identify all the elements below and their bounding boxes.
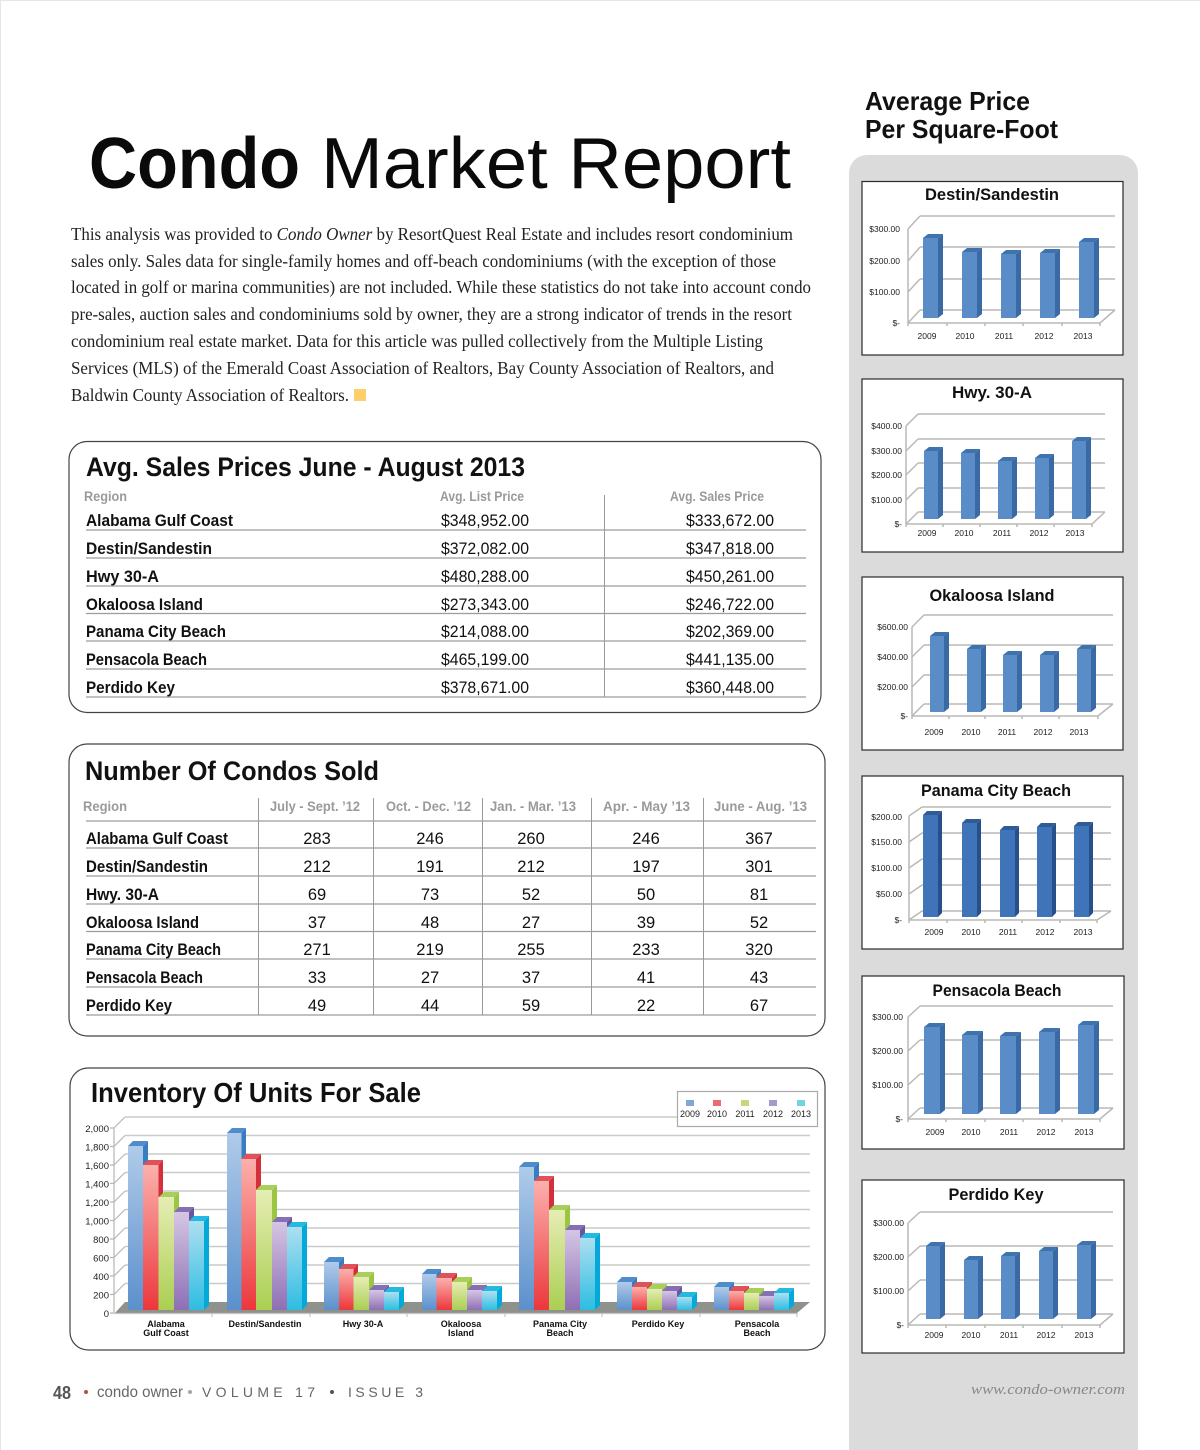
row: Okaloosa Island: 52 <box>750 914 768 932</box>
bars <box>924 1021 1099 1114</box>
y axis labels: 1,800 <box>85 1142 109 1154</box>
chart: Hwy. 30-A price per square foot <box>862 379 1123 552</box>
row: Hwy. 30-A: Hwy. 30-A <box>86 886 159 904</box>
row: Alabama Gulf Coast: 246 <box>416 830 444 848</box>
chart: Destin/Sandestin price per square foot: 2011 <box>995 331 1013 341</box>
y axis labels <box>85 1124 109 1320</box>
row: Panama City Beach <box>86 623 806 641</box>
chart: Panama City Beach price per square foot: $200.00 <box>871 812 902 822</box>
chart: Panama City Beach price per square foot: 2012 <box>1036 927 1055 937</box>
legend: 2012 <box>763 1109 783 1119</box>
chart: Destin/Sandestin price per square foot: 2012 <box>1035 331 1054 341</box>
column headers: June - Aug. ’13 <box>714 799 807 814</box>
chart: Panama City Beach price per square foot: $100.00 <box>871 863 902 873</box>
chart: Hwy. 30-A price per square foot: 2012 <box>1030 528 1049 538</box>
row: Pensacola Beach: $465,199.00 <box>441 651 529 669</box>
chart: Pensacola Beach price per square foot: 2010 <box>962 1127 981 1137</box>
column headers: Region <box>84 489 127 504</box>
chart: Hwy. 30-A price per square foot: $100.00 <box>871 495 902 505</box>
legend <box>678 1092 818 1126</box>
chart: Okaloosa Island price per square foot: 2012 <box>1034 727 1053 737</box>
chart: Pensacola Beach price per square foot: 2013 <box>1075 1127 1094 1137</box>
x axis labels: Beach <box>743 1328 771 1338</box>
chart: Destin/Sandestin price per square foot: Destin/Sandestin <box>925 185 1059 204</box>
row: Perdido Key: $378,671.00 <box>441 679 529 697</box>
chart: Okaloosa Island price per square foot: 2013 <box>1070 727 1089 737</box>
row: Panama City Beach: 219 <box>416 941 444 959</box>
row: Alabama Gulf Coast: $333,672.00 <box>686 512 774 530</box>
row: Alabama Gulf Coast: Alabama Gulf Coast <box>86 512 233 530</box>
x axis labels: Panama City <box>533 1319 587 1329</box>
row: Panama City Beach: Panama City Beach <box>86 623 226 641</box>
chart: Pensacola Beach price per square foot: $100.00 <box>872 1080 903 1090</box>
intro text block: Baldwin County Association of Realtors. <box>71 385 349 405</box>
bars <box>923 234 1099 318</box>
chart: Hwy. 30-A price per square foot: Hwy. 30-A <box>952 383 1032 402</box>
row: Panama City Beach: 320 <box>745 941 773 959</box>
row: Alabama Gulf Coast: 260 <box>517 830 545 848</box>
intro text block <box>71 224 811 405</box>
chart: Pensacola Beach price per square foot: $300.00 <box>872 1012 903 1022</box>
x axis labels: Island <box>448 1328 474 1338</box>
row: Alabama Gulf Coast <box>86 512 806 530</box>
chart: Perdido Key price per square foot: $200.00 <box>873 1252 904 1262</box>
chart: Panama City Beach price per square foot: $150.00 <box>871 837 902 847</box>
chart: Hwy. 30-A price per square foot: 2011 <box>993 528 1011 538</box>
row: Hwy. 30-A: 81 <box>750 886 768 904</box>
row: Okaloosa Island: 39 <box>637 914 655 932</box>
row: Alabama Gulf Coast: 367 <box>745 830 773 848</box>
row: Pensacola Beach <box>86 969 816 987</box>
chart: Panama City Beach price per square foot <box>862 776 1123 949</box>
row: Destin/Sandestin: Destin/Sandestin <box>86 858 208 876</box>
chart: Okaloosa Island price per square foot: Okaloosa Island <box>930 586 1054 605</box>
chart: Okaloosa Island price per square foot: 2009 <box>925 727 944 737</box>
intro text block: located in golf or marina communities) are not included. While these statistics do not take into account condo <box>71 277 811 297</box>
chart: Destin/Sandestin price per square foot: $- <box>892 318 900 328</box>
sidebar heading <box>865 86 1058 144</box>
chart: Perdido Key price per square foot: Perdido Key <box>948 1185 1044 1204</box>
chart: Hwy. 30-A price per square foot: 2010 <box>955 528 974 538</box>
chart: Pensacola Beach price per square foot: 2012 <box>1037 1127 1056 1137</box>
chart: Pensacola Beach price per square foot: $- <box>895 1114 903 1124</box>
row: Perdido Key <box>86 679 806 697</box>
y axis labels: 800 <box>93 1235 109 1246</box>
chart: Perdido Key price per square foot: $100.00 <box>873 1286 904 1296</box>
row: Hwy. 30-A: 73 <box>421 886 439 904</box>
chart: Panama City Beach price per square foot: 2009 <box>925 927 944 937</box>
chart: Perdido Key price per square foot: $- <box>896 1320 904 1330</box>
footer: page number and issue line: VOLUME 17 <box>202 1384 315 1400</box>
x axis labels: Destin/Sandestin <box>228 1319 302 1329</box>
row: Pensacola Beach: Pensacola Beach <box>86 969 203 987</box>
x axis labels: Alabama <box>147 1319 186 1329</box>
chart: Perdido Key price per square foot: 2011 <box>1000 1330 1018 1340</box>
row: Okaloosa Island: 48 <box>421 914 439 932</box>
chart: Okaloosa Island price per square foot: 2011 <box>998 727 1016 737</box>
chart: Panama City Beach price per square foot: Panama City Beach <box>921 781 1071 800</box>
chart: Pensacola Beach price per square foot <box>862 976 1124 1149</box>
row: Pensacola Beach: 43 <box>750 969 768 987</box>
chart: Pensacola Beach price per square foot: $200.00 <box>872 1046 903 1056</box>
row: Perdido Key: 59 <box>522 997 540 1015</box>
title: Market Report <box>321 124 791 204</box>
chart: Destin/Sandestin price per square foot: 2010 <box>956 331 975 341</box>
row: Okaloosa Island: $246,722.00 <box>686 596 774 614</box>
row: Alabama Gulf Coast <box>86 830 816 848</box>
row: Perdido Key <box>86 997 816 1015</box>
footer: page number and issue line: ISSUE 3 <box>348 1384 423 1400</box>
y axis labels: 0 <box>104 1309 109 1320</box>
row: Hwy 30-A: Hwy 30-A <box>86 568 159 586</box>
chart: Pensacola Beach price per square foot: Pensacola Beach <box>932 981 1062 1000</box>
chart: Destin/Sandestin price per square foot: 2009 <box>918 331 937 341</box>
chart: Hwy. 30-A price per square foot: $200.00 <box>871 470 902 480</box>
chart: Hwy. 30-A price per square foot: 2009 <box>918 528 937 538</box>
row: Destin/Sandestin: 212 <box>303 858 331 876</box>
chart: Destin/Sandestin price per square foot: $300.00 <box>869 224 900 234</box>
column headers: Apr. - May ’13 <box>603 799 690 814</box>
chart: Okaloosa Island price per square foot: $400.00 <box>877 652 908 662</box>
chart: Perdido Key price per square foot: 2009 <box>925 1330 944 1340</box>
sidebar heading: Per Square-Foot <box>865 114 1058 144</box>
bars: Pensacola Beach <box>714 1282 794 1310</box>
chart: Hwy. 30-A price per square foot: 2013 <box>1066 528 1085 538</box>
row: Okaloosa Island <box>86 914 816 932</box>
y axis labels: 1,200 <box>85 1198 109 1209</box>
row: Destin/Sandestin <box>86 858 816 876</box>
panel: number of condos sold table <box>69 744 825 1036</box>
row: Panama City Beach: 233 <box>632 941 660 959</box>
row: Alabama Gulf Coast: 283 <box>303 830 331 848</box>
legend: 2009 <box>680 1109 700 1119</box>
bars <box>924 437 1091 519</box>
row: Destin/Sandestin: 197 <box>632 858 660 876</box>
row: Okaloosa Island <box>86 596 806 614</box>
row: Panama City Beach: $214,088.00 <box>441 623 529 641</box>
chart: Destin/Sandestin price per square foot: $200.00 <box>869 256 900 266</box>
bars: Perdido Key <box>617 1277 697 1310</box>
x axis labels: Pensacola <box>735 1319 780 1329</box>
row: Alabama Gulf Coast: $348,952.00 <box>441 512 529 530</box>
panel: average sales prices table <box>69 442 821 712</box>
x axis labels: Gulf Coast <box>143 1328 189 1338</box>
row: Perdido Key: 22 <box>637 997 655 1015</box>
panel: inventory of units for sale <box>70 1068 825 1350</box>
chart: Perdido Key price per square foot: 2010 <box>962 1330 981 1340</box>
row: Pensacola Beach: 27 <box>421 969 439 987</box>
intro text block: condominium real estate market. Data for this article was pulled collectively from the Multiple Listing <box>71 331 763 351</box>
row: Destin/Sandestin: $372,082.00 <box>441 540 529 558</box>
x axis labels: Perdido Key <box>632 1319 684 1329</box>
chart: Panama City Beach price per square foot: 2013 <box>1074 927 1093 937</box>
legend: 2011 <box>735 1109 755 1119</box>
chart: Okaloosa Island price per square foot: $- <box>900 711 908 721</box>
chart: Hwy. 30-A price per square foot: $- <box>894 519 902 529</box>
column headers: Region <box>83 799 127 814</box>
chart: Panama City Beach price per square foot: 2011 <box>999 927 1017 937</box>
row: Hwy 30-A: $450,261.00 <box>686 568 774 586</box>
row: Pensacola Beach: 41 <box>637 969 655 987</box>
row: Panama City Beach <box>86 941 816 959</box>
footer: page number and issue line: 48 <box>53 1383 71 1403</box>
column headers: Avg. Sales Price <box>670 489 764 504</box>
row: Hwy 30-A <box>86 568 806 586</box>
y axis labels: 2,000 <box>85 1124 109 1135</box>
footer: website: www.condo-owner.com <box>971 1382 1125 1398</box>
chart: Okaloosa Island price per square foot: $200.00 <box>877 682 908 692</box>
y axis labels: 600 <box>93 1254 109 1264</box>
row: Alabama Gulf Coast: Alabama Gulf Coast <box>86 830 228 848</box>
chart: Destin/Sandestin price per square foot <box>862 182 1123 355</box>
row: Pensacola Beach: Pensacola Beach <box>86 651 207 669</box>
panel heading: Inventory Of Units For Sale <box>91 1077 421 1108</box>
x axis labels: Beach <box>546 1328 574 1338</box>
bars <box>926 1241 1096 1319</box>
x axis labels <box>143 1319 780 1338</box>
table heading: Avg. Sales Prices June - August 2013 <box>86 452 525 482</box>
row: Perdido Key: Perdido Key <box>86 997 173 1015</box>
row: Perdido Key: $360,448.00 <box>686 679 774 697</box>
y axis labels: 400 <box>93 1272 109 1283</box>
chart: Perdido Key price per square foot: 2012 <box>1037 1330 1056 1340</box>
chart: Okaloosa Island price per square foot <box>862 577 1123 750</box>
chart: Okaloosa Island price per square foot: $600.00 <box>877 622 908 632</box>
legend: 2010 <box>707 1109 727 1119</box>
row: Destin/Sandestin <box>86 540 806 558</box>
row: Okaloosa Island: 37 <box>308 914 326 932</box>
intro text block: pre-sales, auction sales and condominiums sold by owner, they are a strong indicator of trends in the resort <box>71 304 792 324</box>
bars: Destin/Sandestin <box>227 1128 307 1310</box>
intro text block: sales only. Sales data for single-family homes and off-beach condominiums (with the exception of those <box>71 251 776 271</box>
row: Panama City Beach: 255 <box>517 941 545 959</box>
y axis labels: 1,400 <box>85 1180 109 1190</box>
chart: Pensacola Beach price per square foot: 2011 <box>1000 1127 1018 1137</box>
column headers: Oct. - Dec. ’12 <box>386 799 471 814</box>
footer: page number and issue line: condo owner <box>97 1384 184 1401</box>
row: Perdido Key: 67 <box>750 997 768 1015</box>
column headers <box>83 799 807 814</box>
row: Perdido Key: Perdido Key <box>86 679 176 697</box>
row: Hwy. 30-A: 50 <box>637 886 655 904</box>
x axis labels: Okaloosa <box>441 1319 482 1329</box>
row: Pensacola Beach <box>86 651 806 669</box>
row: Destin/Sandestin: 212 <box>517 858 545 876</box>
legend: 2013 <box>791 1109 811 1119</box>
chart: Pensacola Beach price per square foot: 2009 <box>926 1127 945 1137</box>
row: Panama City Beach: $202,369.00 <box>686 623 774 641</box>
row: Destin/Sandestin: Destin/Sandestin <box>86 540 212 558</box>
column headers: July - Sept. ’12 <box>270 799 360 814</box>
row: Destin/Sandestin: 301 <box>745 858 773 876</box>
table heading: Number Of Condos Sold <box>85 756 379 786</box>
row: Panama City Beach: 271 <box>303 941 331 959</box>
column headers: Avg. List Price <box>440 489 524 504</box>
x axis labels: Hwy 30-A <box>343 1319 384 1329</box>
bars: Alabama Gulf Coast <box>128 1141 209 1310</box>
row: Perdido Key: 49 <box>308 997 326 1015</box>
row: Okaloosa Island: Okaloosa Island <box>86 914 199 932</box>
chart: Okaloosa Island price per square foot: 2010 <box>962 727 981 737</box>
panel: average price per square-foot sidebar <box>849 155 1138 1450</box>
chart: Panama City Beach price per square foot: $50.00 <box>876 889 902 899</box>
row: Destin/Sandestin: $347,818.00 <box>686 540 774 558</box>
row: Destin/Sandestin: 191 <box>416 858 444 876</box>
chart floor <box>115 1302 810 1313</box>
chart: Panama City Beach price per square foot: 2010 <box>962 927 981 937</box>
row: Okaloosa Island: 27 <box>522 914 540 932</box>
intro text block: This analysis was provided to Condo Owner by ResortQuest Real Estate and includes resort condominium <box>71 224 793 244</box>
row: Pensacola Beach: 37 <box>522 969 540 987</box>
chart: Perdido Key price per square foot <box>862 1180 1124 1353</box>
chart: Destin/Sandestin price per square foot: $100.00 <box>869 287 900 297</box>
row: Hwy 30-A: $480,288.00 <box>441 568 529 586</box>
y axis labels: 200 <box>93 1290 109 1302</box>
row: Pensacola Beach: 33 <box>308 969 326 987</box>
bars: Panama City Beach <box>519 1162 600 1310</box>
column headers: Jan. - Mar. ’13 <box>490 799 576 814</box>
chart: Panama City Beach price per square foot: $- <box>894 915 902 925</box>
row: Pensacola Beach: $441,135.00 <box>686 651 774 669</box>
row: Perdido Key: 44 <box>421 997 439 1015</box>
bars: Okaloosa Island <box>422 1269 502 1310</box>
row: Hwy. 30-A: 69 <box>308 886 326 904</box>
title: Condo <box>89 124 300 204</box>
footer: page number and issue line <box>53 1383 423 1403</box>
bars: Hwy 30-A <box>324 1257 404 1310</box>
row: Panama City Beach: Panama City Beach <box>86 941 221 959</box>
bar chart: inventory by region <box>85 1117 810 1338</box>
chart: Destin/Sandestin price per square foot: 2013 <box>1074 331 1093 341</box>
title <box>89 124 791 204</box>
sidebar heading: Average Price <box>865 86 1030 116</box>
row: Hwy. 30-A <box>86 886 816 904</box>
y axis labels: 1,000 <box>85 1216 109 1228</box>
chart: Hwy. 30-A price per square foot: $300.00 <box>871 446 902 456</box>
chart: Perdido Key price per square foot: 2013 <box>1075 1330 1094 1340</box>
row: Okaloosa Island: $273,343.00 <box>441 596 529 614</box>
intro text block: Services (MLS) of the Emerald Coast Association of Realtors, Bay County Association of Realtors, and <box>71 358 774 378</box>
column headers <box>84 489 764 504</box>
row: Alabama Gulf Coast: 246 <box>632 830 660 848</box>
y axis labels: 1,600 <box>85 1161 109 1172</box>
chart: Perdido Key price per square foot: $300.00 <box>873 1218 904 1228</box>
bars <box>930 632 1096 712</box>
row: Hwy. 30-A: 52 <box>522 886 540 904</box>
chart: Hwy. 30-A price per square foot: $400.00 <box>871 421 902 431</box>
row: Okaloosa Island: Okaloosa Island <box>86 596 203 614</box>
bars <box>923 811 1093 917</box>
